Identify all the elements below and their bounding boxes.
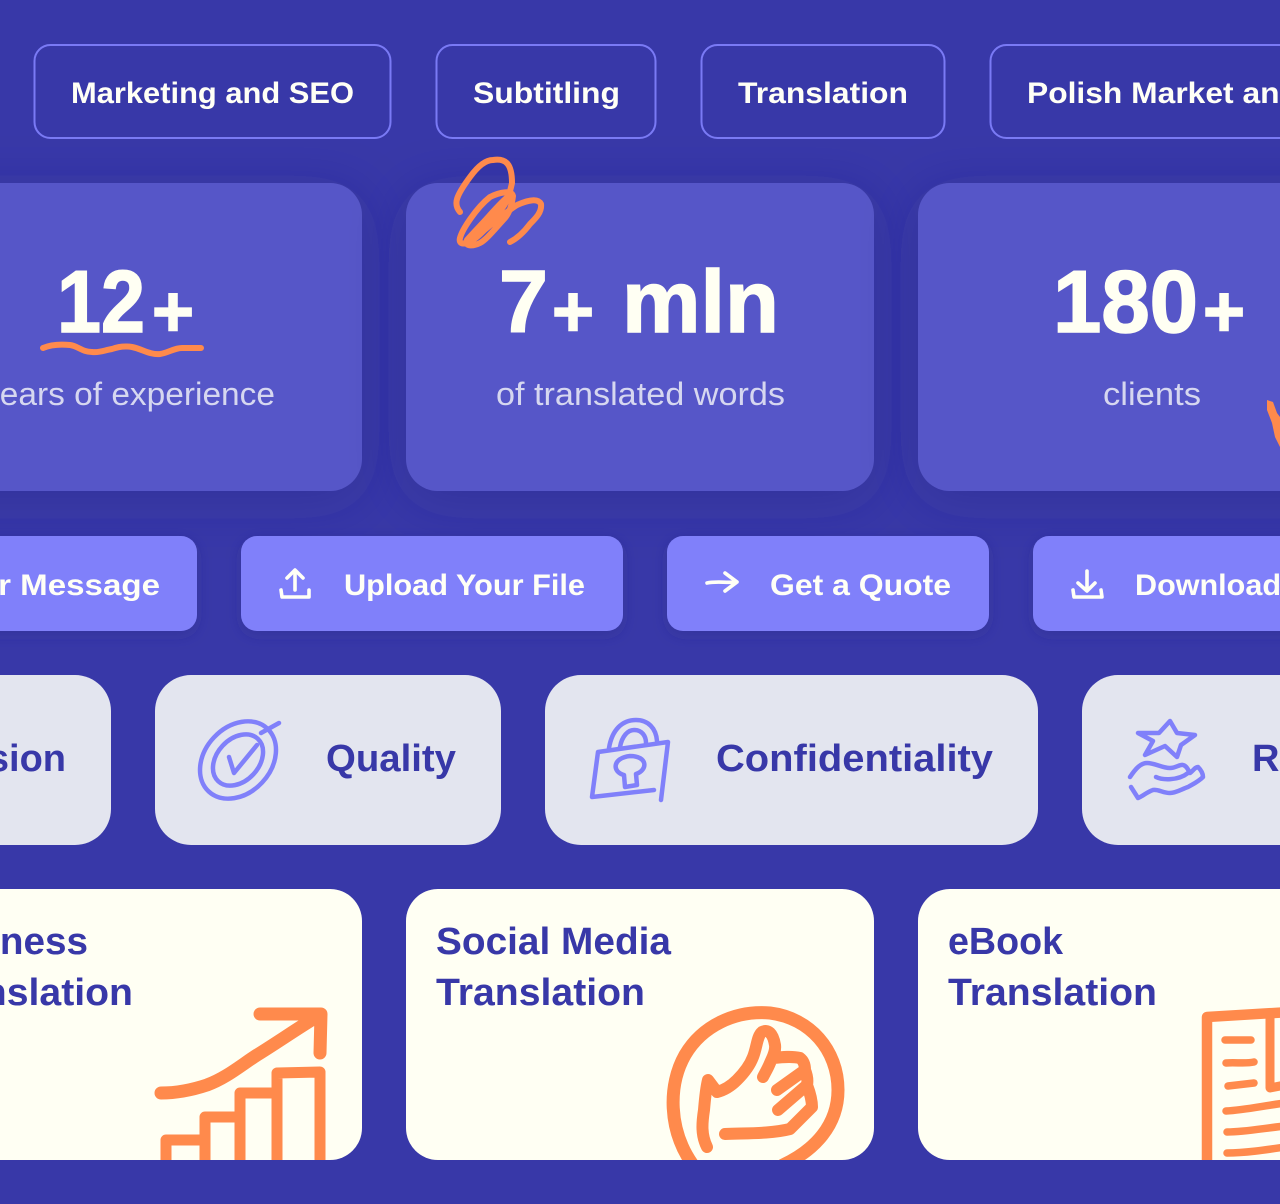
tag: Marketing and SEO: Marketing and SEO <box>71 77 354 110</box>
icon: growth chart <box>161 1014 321 1170</box>
tag row <box>34 45 1280 138</box>
value card: Confidentiality <box>545 675 1038 845</box>
icon: star over hand <box>1130 721 1203 798</box>
button: Your Message <box>0 536 197 631</box>
button: Upload Your File: Upload Your File <box>344 569 585 602</box>
panel: eBook Translation: Translation <box>948 972 1157 1014</box>
icon: target check <box>185 706 291 814</box>
panel: 12+ years of experience: 12 <box>57 252 145 351</box>
tag: Translation <box>702 45 944 138</box>
panel: Social Media Translation <box>406 889 874 1165</box>
icon: thumbs up <box>673 1013 838 1165</box>
button: Upload Your File <box>241 536 623 631</box>
value row <box>0 675 1280 845</box>
panel: eBook Translation: eBook <box>948 921 1064 963</box>
icon: arrow right <box>707 573 737 591</box>
value card: Quality <box>155 675 501 845</box>
tag: Subtitling: Subtitling <box>473 77 620 110</box>
icon: padlock <box>592 720 668 800</box>
scribble: orange corner mark <box>1267 400 1280 447</box>
value card: Reliability <box>1082 675 1280 845</box>
panel: Social Media Translation: Social Media <box>436 921 672 963</box>
panel: eBook Translation <box>918 889 1280 1170</box>
panel: 12+ years of experience <box>0 183 362 491</box>
icon: download <box>1073 571 1102 597</box>
icon: upload <box>281 570 309 597</box>
panel: 7+ mln of translated words: mln <box>622 252 779 351</box>
panel: 180+ clients: 180 <box>1053 252 1198 351</box>
scribble: orange loops <box>456 160 541 245</box>
service cards <box>0 889 1280 1170</box>
icon: open book page <box>1207 1012 1280 1170</box>
value card: Confidentiality: Confidentiality <box>716 738 993 780</box>
button: Download <box>1033 536 1280 631</box>
value card: Quality: Quality <box>326 738 456 780</box>
panel: 180+ clients <box>918 183 1280 491</box>
tag: Polish Market and Culture <box>990 45 1280 138</box>
tag: Marketing and SEO <box>34 45 390 138</box>
panel: 12+ years of experience: + <box>152 272 194 352</box>
panel: Social Media Translation: Translation <box>436 972 645 1014</box>
button row <box>0 536 1280 631</box>
panel: 180+ clients: + <box>1203 272 1245 352</box>
panel: Business Translation <box>0 889 362 1170</box>
panel: 180+ clients: clients <box>1103 376 1201 412</box>
panel: 7+ mln of translated words <box>406 183 874 491</box>
panel: 7+ mln of translated words: 7 <box>499 252 548 351</box>
panel: 7+ mln of translated words: + <box>552 272 594 352</box>
button: Download: Download <box>1135 569 1280 602</box>
tag: Translation: Translation <box>738 77 908 110</box>
scribble: orange underline <box>43 345 201 354</box>
panel: stat cards <box>0 160 1280 491</box>
value card: Precision <box>0 675 111 845</box>
tag: Subtitling <box>436 45 656 138</box>
button: Get a Quote: Get a Quote <box>770 569 951 602</box>
button: Get a Quote <box>667 536 989 631</box>
panel: 7+ mln of translated words: of translated words <box>496 376 785 412</box>
